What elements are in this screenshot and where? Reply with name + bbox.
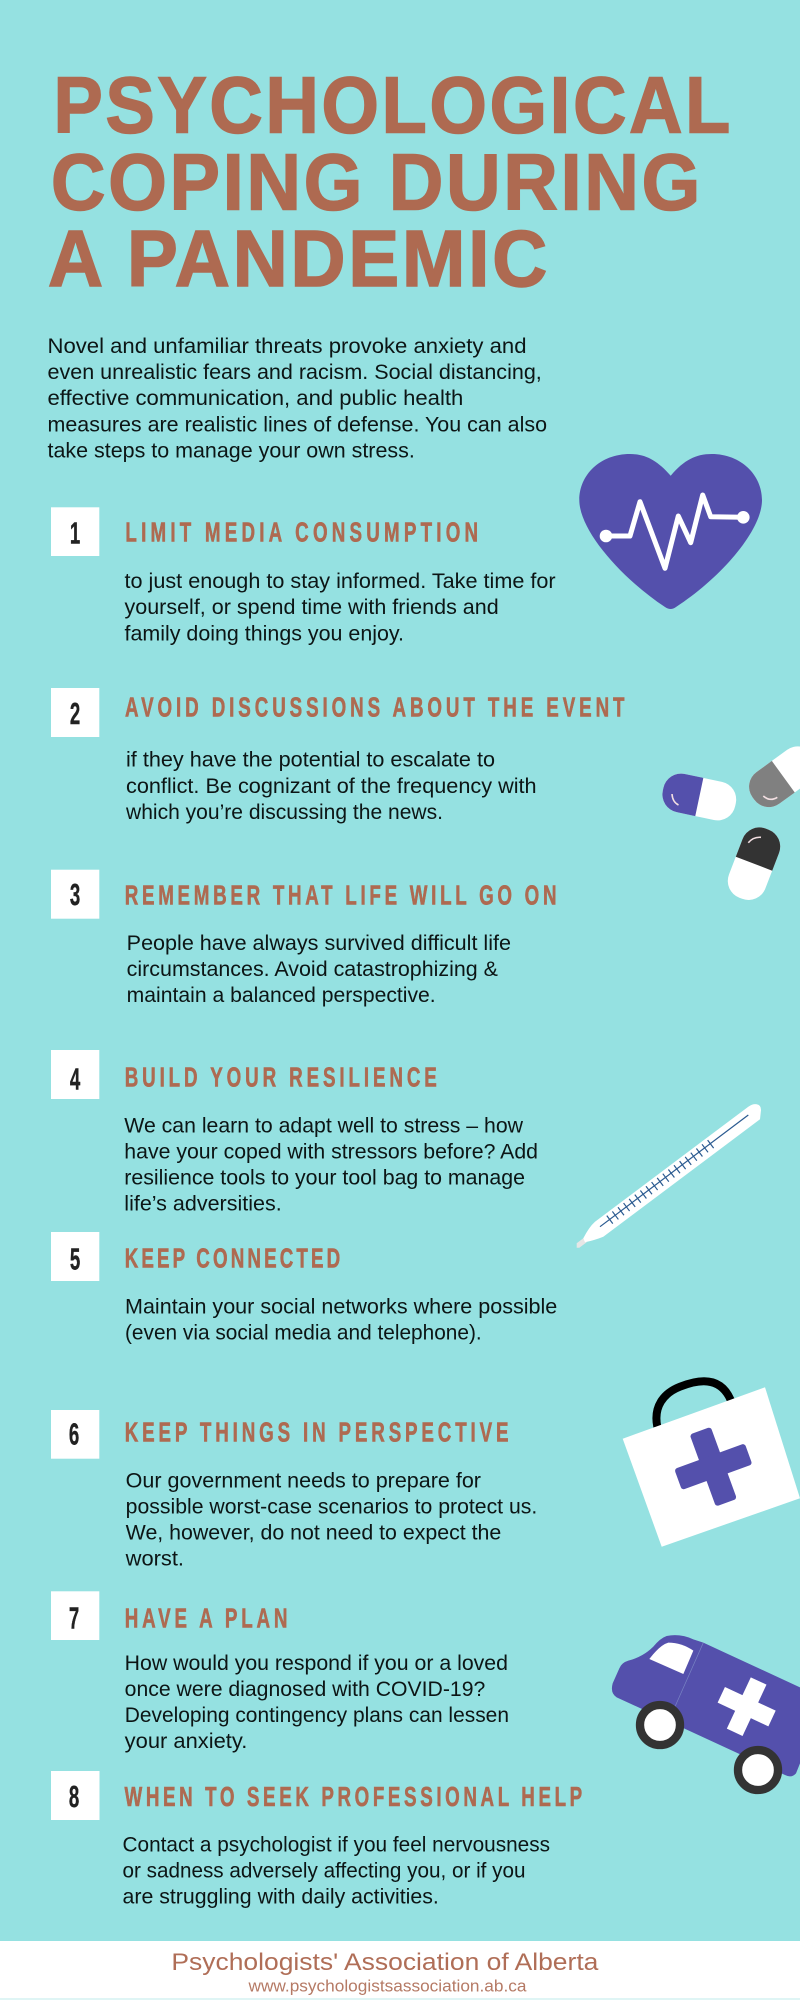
item 8 bbox=[51, 1771, 582, 1909]
item 6: KEEP THINGS IN PERSPECTIVE bbox=[125, 1418, 508, 1449]
item 6: Our government needs to prepare for bbox=[126, 1469, 481, 1492]
item 1: LIMIT MEDIA CONSUMPTION bbox=[125, 518, 478, 549]
item 7: Developing contingency plans can lessen bbox=[125, 1704, 509, 1727]
item 6: 6 bbox=[69, 1418, 79, 1452]
item 8: Contact a psychologist if you feel nervousness bbox=[122, 1834, 550, 1857]
item 8: 8 bbox=[69, 1780, 79, 1814]
item 4: We can learn to adapt well to stress – how bbox=[124, 1114, 524, 1137]
title bbox=[48, 60, 733, 303]
item 3: circumstances. Avoid catastrophizing & bbox=[127, 958, 498, 981]
item 1 bbox=[51, 507, 556, 646]
footer band bbox=[0, 1941, 800, 2000]
intro text: measures are realistic lines of defense. You can also bbox=[48, 414, 547, 436]
item 1: 1 bbox=[70, 517, 80, 551]
footer organisation name: Psychologists' Association of Alberta bbox=[171, 1949, 599, 1976]
item 7: HAVE A PLAN bbox=[125, 1604, 287, 1635]
item 1: to just enough to stay informed. Take time for bbox=[124, 570, 556, 593]
item 7: your anxiety. bbox=[125, 1730, 247, 1753]
icon: pills bbox=[659, 739, 800, 905]
item 8: are struggling with daily activities. bbox=[122, 1886, 439, 1909]
item 7: 7 bbox=[69, 1602, 79, 1636]
title: PSYCHOLOGICAL bbox=[54, 60, 733, 150]
item 4: life’s adversities. bbox=[124, 1193, 282, 1216]
item 1: family doing things you enjoy. bbox=[124, 622, 404, 646]
item 2: if they have the potential to escalate to bbox=[126, 749, 495, 772]
icon: thermometer bbox=[577, 1104, 761, 1248]
item 6 bbox=[51, 1410, 537, 1570]
item 4: resilience tools to your tool bag to manage bbox=[124, 1166, 525, 1189]
item 2: 2 bbox=[70, 697, 80, 731]
item 5: Maintain your social networks where possible bbox=[125, 1295, 557, 1318]
intro text: Novel and unfamiliar threats provoke anxiety and bbox=[48, 335, 526, 358]
item 8: WHEN TO SEEK PROFESSIONAL HELP bbox=[124, 1783, 582, 1813]
item 6: possible worst-case scenarios to protect us. bbox=[126, 1495, 537, 1518]
item 3: REMEMBER THAT LIFE WILL GO ON bbox=[125, 881, 557, 912]
item 7: How would you respond if you or a loved bbox=[125, 1652, 508, 1675]
item 4 bbox=[51, 1050, 538, 1216]
item 5 bbox=[51, 1232, 557, 1344]
item 2: AVOID DISCUSSIONS ABOUT THE EVENT bbox=[125, 693, 625, 724]
intro text: effective communication, and public health bbox=[48, 387, 463, 410]
item 4: 4 bbox=[70, 1063, 81, 1097]
title: COPING DURING bbox=[51, 138, 703, 226]
item 7 bbox=[51, 1591, 509, 1753]
item 7: once were diagnosed with COVID-19? bbox=[125, 1678, 485, 1701]
icon: heart with pulse bbox=[579, 454, 762, 609]
item 3: People have always survived difficult life bbox=[127, 932, 511, 955]
item 3: maintain a balanced perspective. bbox=[127, 984, 436, 1007]
item 2 bbox=[51, 688, 625, 824]
item 2: which you’re discussing the news. bbox=[125, 801, 443, 824]
item 2: conflict. Be cognizant of the frequency with bbox=[126, 775, 537, 798]
item 5: (even via social media and telephone). bbox=[125, 1321, 482, 1344]
item 3 bbox=[51, 870, 557, 1007]
item 8: or sadness adversely affecting you, or if you bbox=[122, 1860, 526, 1883]
title: A PANDEMIC bbox=[48, 214, 550, 303]
item 6: We, however, do not need to expect the bbox=[126, 1521, 501, 1544]
item 1: yourself, or spend time with friends and bbox=[124, 596, 499, 619]
intro text bbox=[48, 335, 547, 463]
item 3: 3 bbox=[70, 878, 80, 912]
footer website: www.psychologistsassociation.ab.ca bbox=[247, 1977, 527, 1996]
icon: first aid kit bbox=[623, 1381, 800, 1547]
item 5: KEEP CONNECTED bbox=[125, 1244, 340, 1275]
item 5: 5 bbox=[70, 1243, 80, 1277]
item 4: BUILD YOUR RESILIENCE bbox=[125, 1063, 437, 1094]
icon: ambulance bbox=[612, 1635, 800, 1790]
intro text: even unrealistic fears and racism. Social distancing, bbox=[48, 361, 542, 384]
item 4: have your coped with stressors before? Add bbox=[124, 1140, 538, 1163]
item 6: worst. bbox=[125, 1547, 184, 1570]
intro text: take steps to manage your own stress. bbox=[48, 440, 415, 463]
